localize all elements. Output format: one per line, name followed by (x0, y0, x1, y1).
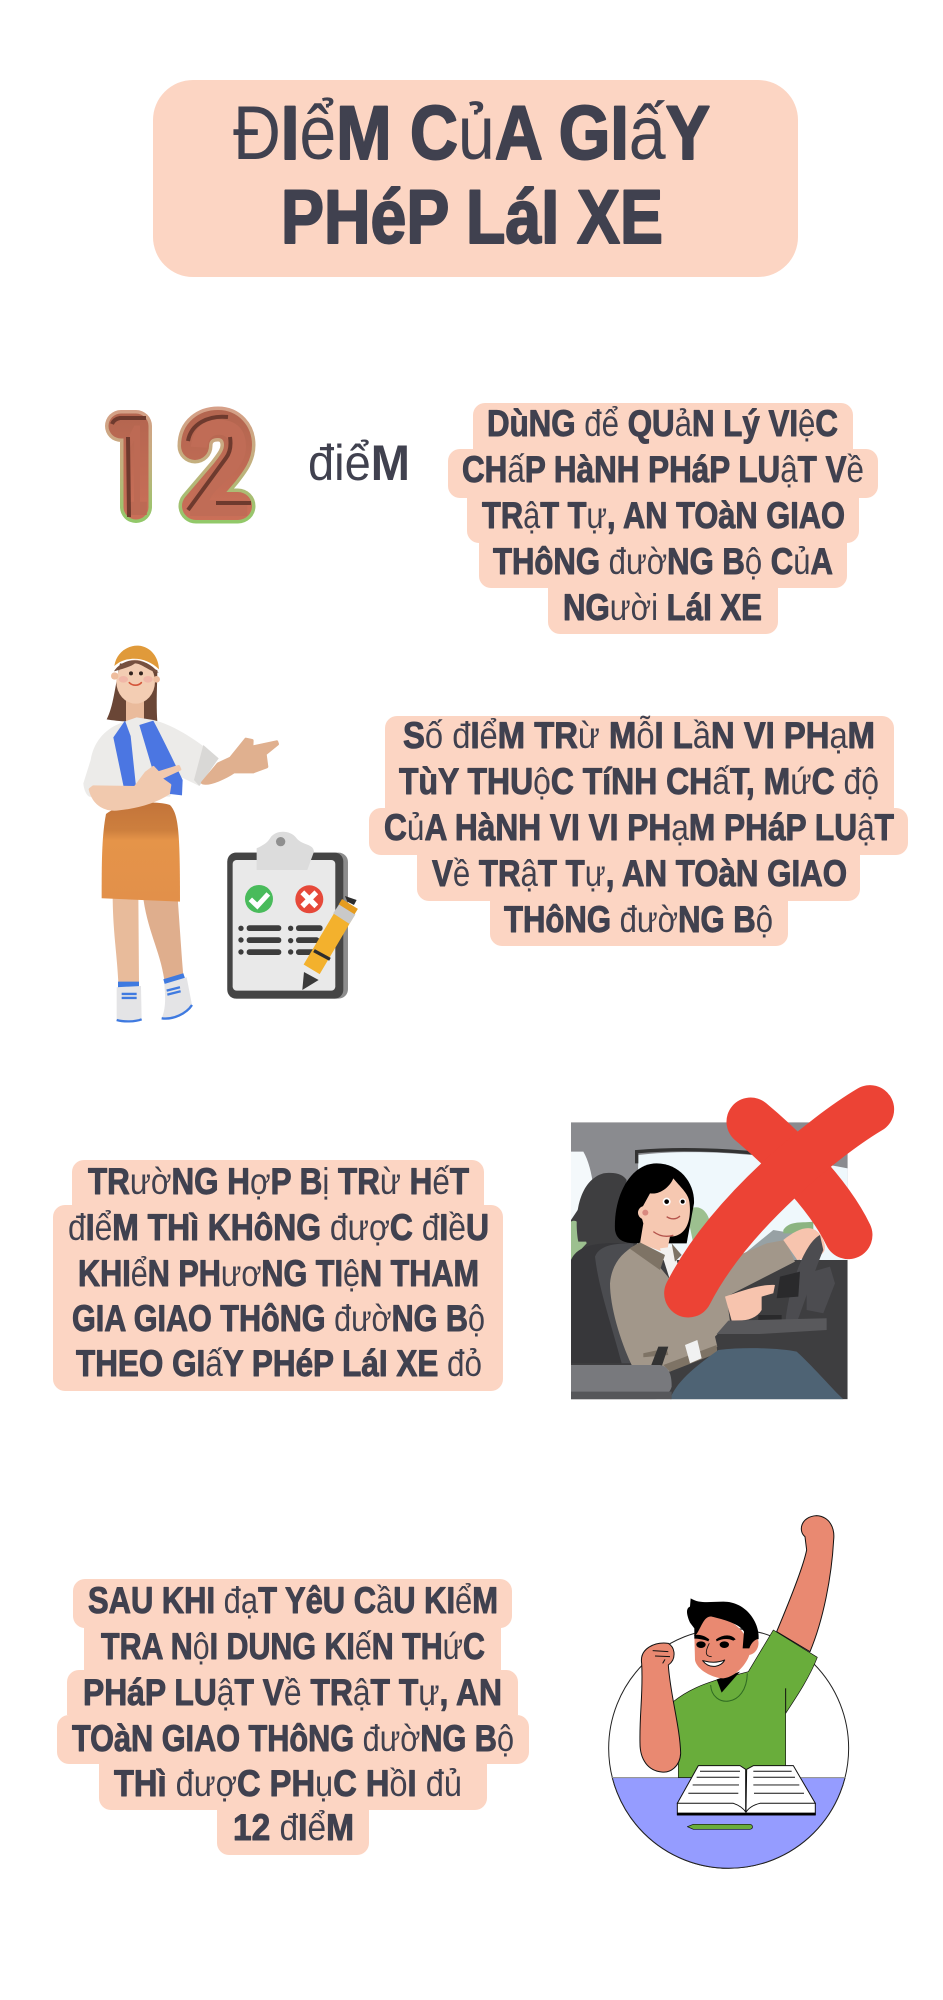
illustration: woman pointing (83, 646, 277, 1021)
title (153, 80, 798, 277)
panel: points deducted per violation: Số đIểM TRừ MỗI LầN VI PHạM (403, 715, 875, 756)
panel: purpose of points: DùNG để QUảN Lý VIệC (487, 403, 838, 444)
panel: all points deducted: đIểM THì KHôNG đượC đIềU (68, 1207, 489, 1248)
panel: points deducted per violation: CủA HàNH VI VI PHạM PHáP LUậT (384, 807, 894, 848)
panel: all points deducted: THEO GIấY PHéP LáI XE đỏ (76, 1343, 482, 1384)
title: ĐIểM CủA GIấY (233, 91, 710, 176)
panel: purpose of points (448, 403, 878, 634)
panel: purpose of points: NGười LáI XE (563, 587, 762, 628)
panel: recovering points (57, 1579, 529, 1855)
panel: recovering points: TOàN GIAO THôNG đườNG Bộ (72, 1718, 514, 1759)
panel: recovering points: SAU KHI đạT YêU CầU KIểM (88, 1580, 498, 1621)
panel: recovering points: PHáP LUậT Về TRậT Tự, AN (83, 1672, 502, 1713)
big number: 12 điểm: điểM (308, 435, 410, 491)
panel: purpose of points: THôNG đườNG Bộ CủA (493, 541, 833, 582)
panel: points deducted per violation (369, 715, 908, 946)
panel: points deducted per violation: Về TRậT Tự, AN TOàN GIAO (432, 853, 847, 894)
illustration: student celebrating with book (609, 1516, 849, 1868)
title: PHéP LáI XE (281, 175, 663, 260)
panel: purpose of points: CHấP HàNH PHáP LUậT Về (462, 449, 864, 490)
panel: all points deducted: TRườNG HợP Bị TRừ HếT (88, 1161, 469, 1202)
panel: recovering points: THì đượC PHụC HồI đủ (114, 1763, 462, 1804)
icon: red cross mark (688, 1109, 870, 1293)
big number: 12 điểm: 2 (186, 392, 252, 546)
panel: all points deducted: GIA GIAO THôNG đườNG Bộ (72, 1298, 485, 1339)
panel: all points deducted (53, 1160, 503, 1391)
panel: recovering points: 12 đIểM (233, 1807, 354, 1848)
panel: all points deducted: KHIểN PHươNG TIệN THAM (78, 1253, 479, 1294)
icon: clipboard with check, cross and pen (227, 832, 357, 999)
panel: purpose of points: TRậT Tự, AN TOàN GIAO (482, 495, 845, 536)
big number: 12 điểm (112, 392, 410, 546)
panel: points deducted per violation: TùY THUộC TíNH CHấT, MứC độ (399, 761, 879, 802)
big number: 12 điểm: 1 (124, 397, 148, 543)
panel: points deducted per violation: THôNG đườNG Bộ (504, 899, 773, 940)
illustration: woman driving (571, 1122, 848, 1399)
panel: recovering points: TRA NộI DUNG KIếN THứC (101, 1626, 485, 1667)
